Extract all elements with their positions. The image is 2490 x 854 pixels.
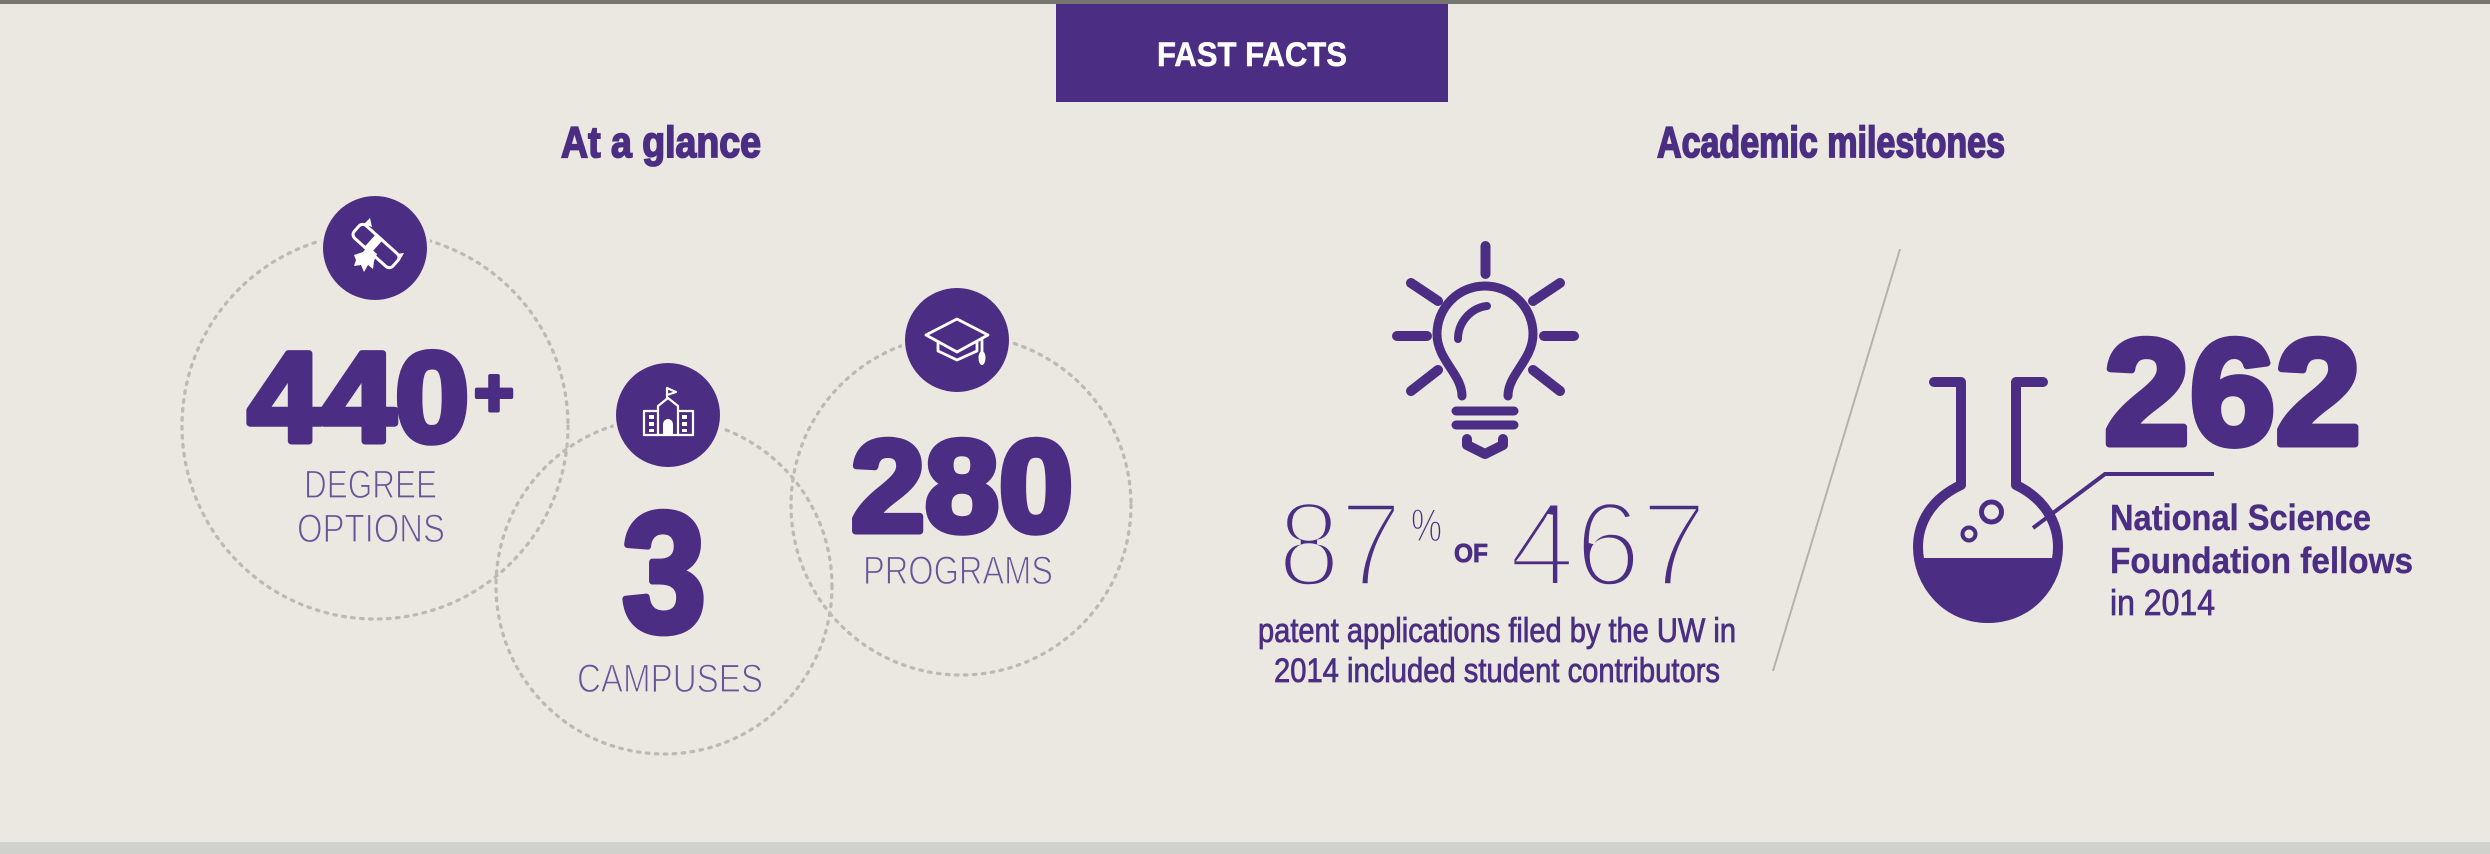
dotted circle: campuses [496, 418, 832, 754]
icon: light bulb [1397, 246, 1574, 454]
stat: 440+ degree options [248, 326, 514, 551]
heading: academic milestones: Academic milestones [1657, 118, 2005, 167]
word: of: OF [1454, 538, 1488, 568]
label: campuses: CAMPUSES [577, 657, 763, 701]
stat: 3 campuses: 3 [622, 478, 706, 668]
label: degree: DEGREE [304, 463, 437, 507]
panel: at a glance [182, 118, 1131, 754]
divider [1773, 249, 1900, 671]
heading: at a glance: At a glance [561, 118, 761, 167]
banner: fast facts [1056, 4, 1448, 102]
stat: 262: 262 [2104, 308, 2361, 476]
text: patent applications: patent applications filed by the UW in [1258, 612, 1736, 650]
text: patent applications: 2014 included student contributors [1274, 652, 1720, 690]
banner: fast facts: FAST FACTS [1157, 36, 1347, 74]
text: national science foundation fellows: in 2014 [2110, 582, 2215, 623]
text: national science foundation fellows: Foundation fellows [2110, 540, 2413, 581]
icon: campus building [616, 363, 720, 467]
dotted circle: degree options [182, 233, 568, 619]
label: options: OPTIONS [297, 507, 445, 551]
percent sign: % [1411, 499, 1442, 551]
dotted circle: programs [791, 335, 1131, 675]
stat: 87 percent: 87 [1278, 476, 1402, 612]
text: patent applications [1258, 612, 1736, 690]
icon: graduation cap [905, 288, 1009, 392]
icon: diploma [323, 196, 427, 300]
text: national science foundation fellows: National Science [2110, 497, 2371, 538]
stat: 467: 467 [1509, 476, 1707, 612]
stat: 3 campuses [577, 478, 763, 701]
text: national science foundation fellows [2110, 497, 2413, 623]
plus sign: + [474, 355, 514, 431]
panel: academic milestones [1258, 118, 2413, 690]
stat: 280 programs: 280 [851, 413, 1073, 559]
label: programs: PROGRAMS [863, 549, 1053, 593]
icon: flask [1916, 382, 2060, 623]
callout line [2033, 474, 2214, 528]
stat: 440+ degree options: 440 [248, 326, 469, 468]
